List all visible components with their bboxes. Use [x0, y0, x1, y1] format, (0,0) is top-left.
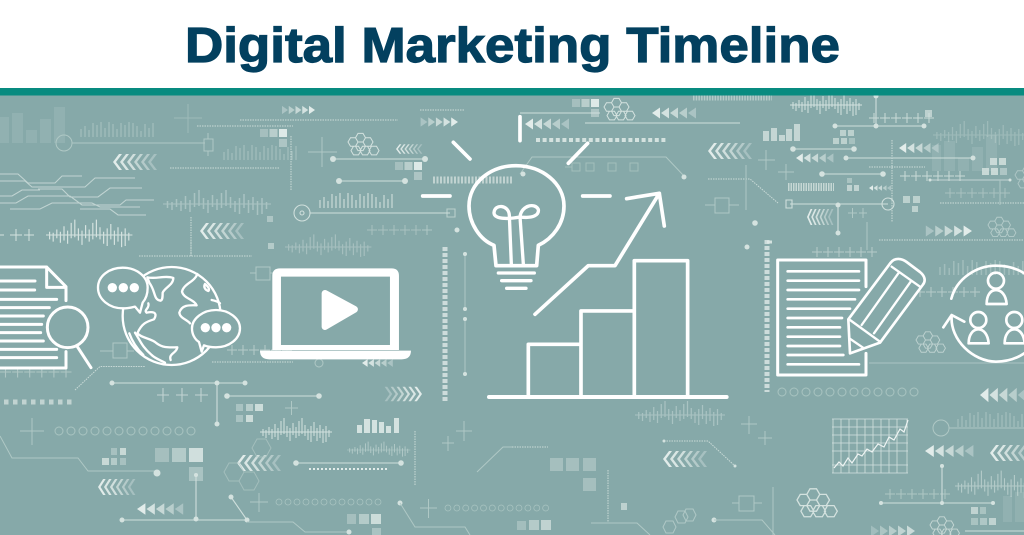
- title: Digital Marketing Timeline: [185, 19, 840, 73]
- teal divider bar: [0, 88, 1024, 96]
- icon: laptop with play button: [260, 268, 411, 359]
- icon: growth bar chart with rising arrow: [489, 193, 727, 397]
- icon: audience cycle: [943, 266, 1024, 362]
- icon: globe with speech bubbles: [98, 267, 240, 365]
- line graph: [832, 419, 908, 473]
- title band: [0, 0, 1024, 88]
- icon: light bulb with rays: [423, 117, 610, 288]
- icon: notepad with pencil: [778, 259, 925, 375]
- icon: document with magnifier: [0, 267, 91, 368]
